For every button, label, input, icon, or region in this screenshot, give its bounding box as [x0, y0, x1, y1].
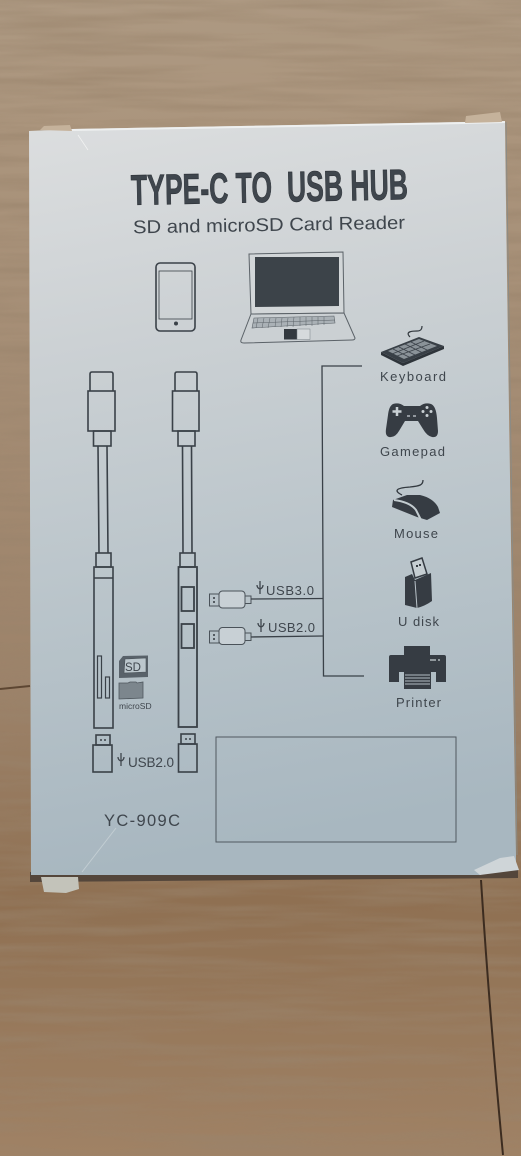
- icon: microSD card: [119, 682, 152, 711]
- hub body: [178, 553, 197, 727]
- icon: gamepad: [386, 403, 438, 437]
- connection lines: [251, 366, 364, 676]
- icon: SD card: [119, 656, 148, 678]
- label: U disk: U disk: [398, 614, 440, 629]
- label: Mouse: Mouse: [394, 526, 438, 541]
- type-c connector: [172, 372, 199, 446]
- subtitle: SD and microSD Card Reader: [133, 212, 405, 237]
- icon: SD card: SD: [125, 662, 141, 674]
- type-c connector: [88, 372, 115, 446]
- label: Printer: Printer: [396, 695, 442, 710]
- card slots: [98, 656, 110, 698]
- label: USB2.0 bottom: USB2.0: [128, 755, 174, 770]
- label: USB3.0: USB3.0: [266, 583, 314, 598]
- icon: mouse: [392, 480, 440, 520]
- icon: U disk: [405, 558, 432, 608]
- icon: printer: [389, 646, 446, 689]
- product box: [29, 112, 519, 893]
- label: USB2.0: USB2.0: [268, 620, 315, 635]
- blank sticker panel: [216, 737, 456, 842]
- USB plug: [178, 734, 197, 772]
- right hub device: USB port side: [172, 372, 199, 772]
- icon: smartphone: [156, 263, 195, 331]
- icon: microSD card: microSD: [119, 701, 152, 711]
- cable: [98, 446, 108, 553]
- USB ports: [182, 587, 194, 648]
- USB 2.0 cable plug: [210, 628, 251, 644]
- USB 3.0 cable plug: [210, 591, 251, 608]
- hub body: [94, 553, 113, 728]
- left hub device: SD reader side: [88, 372, 115, 772]
- model number: YC-909C: [104, 812, 180, 830]
- label: Gamepad: Gamepad: [380, 444, 445, 459]
- USB plug: [93, 735, 112, 772]
- label: Keyboard: Keyboard: [380, 369, 446, 384]
- icon: keyboard: [381, 326, 444, 366]
- icon: laptop: [241, 252, 355, 343]
- cable: [182, 446, 192, 553]
